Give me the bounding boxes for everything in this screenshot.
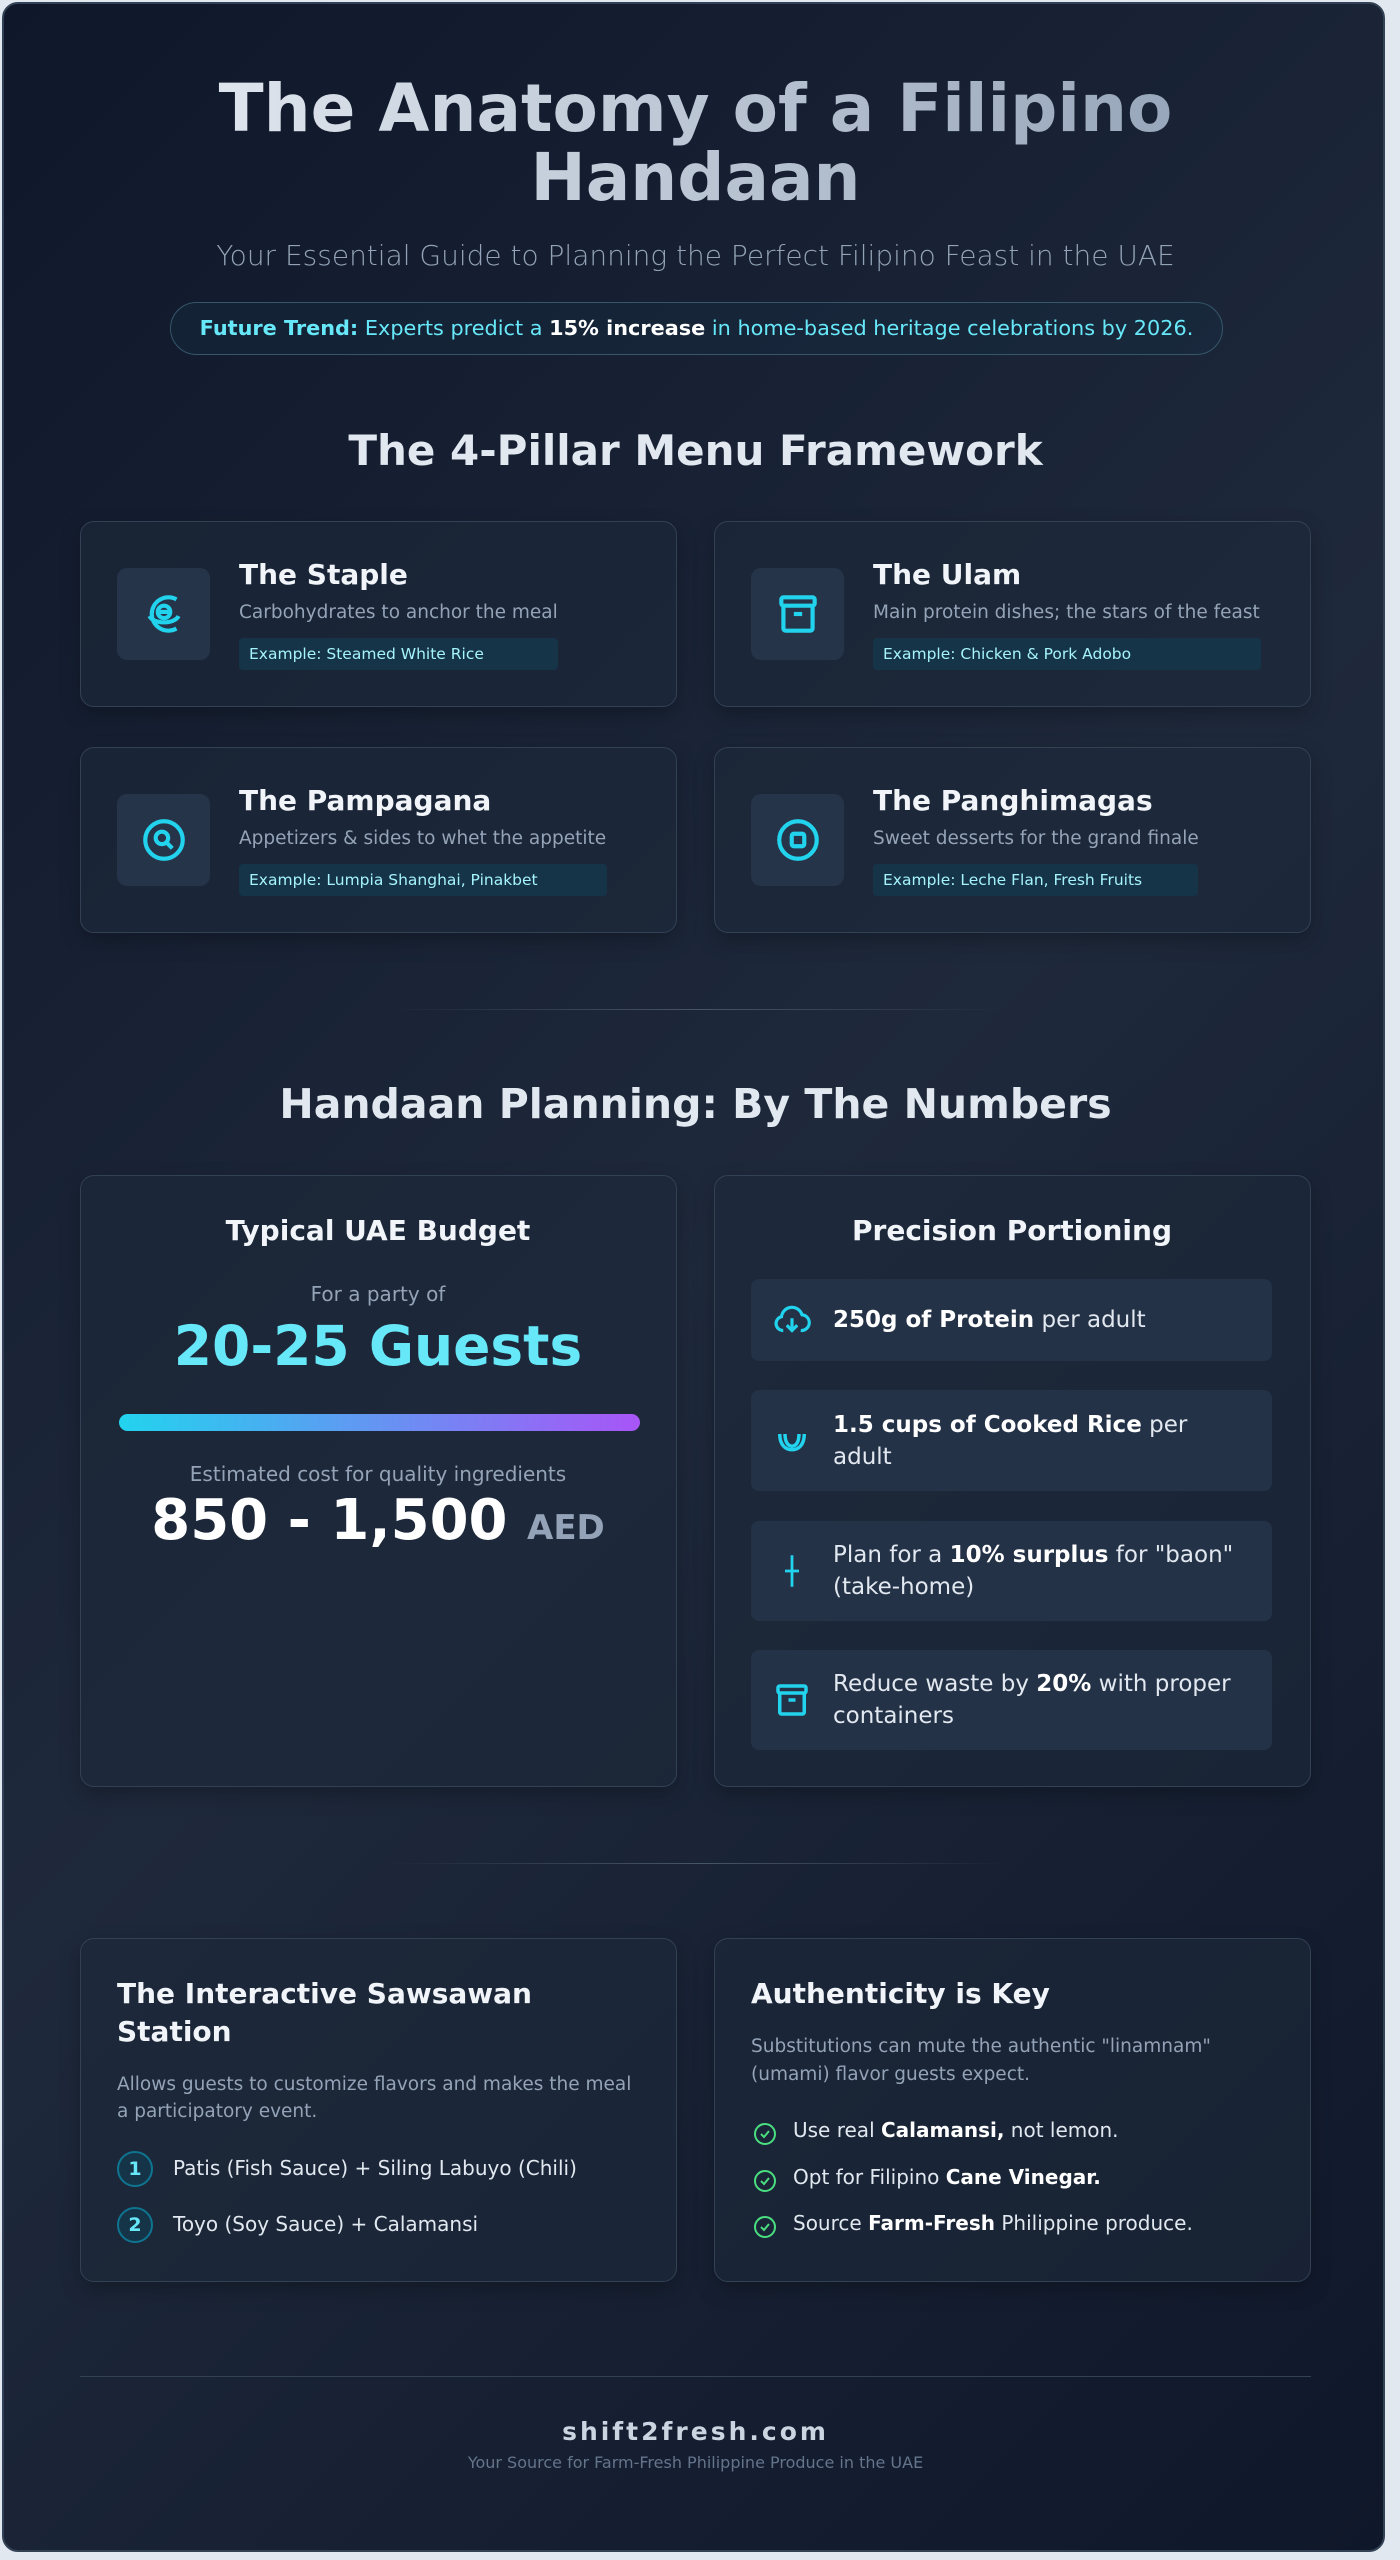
tag: example <box>239 864 607 896</box>
footer: brand: shift2fresh.com <box>562 2417 829 2446</box>
stat: guests: 20-25 Guests <box>174 1314 582 1378</box>
panel: the panghimagas: The Panghimagas <box>873 784 1153 817</box>
item: containers: Reduce waste by 20% with proper containers <box>833 1671 1231 1729</box>
callout: future trend <box>170 302 1223 355</box>
panel: the staple: Carbohydrates to anchor the meal <box>239 602 558 623</box>
panel: budget: Typical UAE Budget <box>226 1214 530 1247</box>
icon: search circle <box>117 794 210 886</box>
item: rice <box>751 1390 1272 1491</box>
check item 3: Source Farm-Fresh Philippine produce. <box>793 2211 1193 2235</box>
heading: by the numbers: Handaan Planning: By The Numbers <box>279 1080 1112 1128</box>
panel: budget <box>80 1175 677 1787</box>
check item 1: Use real Calamansi, not lemon. <box>793 2118 1119 2142</box>
list item 2 <box>117 2207 153 2243</box>
panel: the ulam <box>714 521 1311 707</box>
icon: container <box>751 568 844 660</box>
item: protein <box>751 1279 1272 1361</box>
panel: the ulam: The Ulam <box>873 558 1021 591</box>
stat: cost: 850 - 1,500 AED <box>151 1488 605 1553</box>
item: surplus: Plan for a 10% surplus for "baon" (take-home) <box>833 1542 1233 1600</box>
tag: example <box>239 638 558 670</box>
list item 1 <box>117 2151 153 2187</box>
gradient bar <box>119 1414 640 1431</box>
panel: the staple: The Staple <box>239 558 408 591</box>
heading: 4-pillar: The 4-Pillar Menu Framework <box>348 426 1043 475</box>
callout: future trend: Future Trend: Experts predict a 15% increase in home-based heritage celebrations by 2026. <box>200 316 1193 340</box>
tag: example <box>873 864 1198 896</box>
panel: the ulam: Main protein dishes; the stars of the feast <box>873 602 1260 623</box>
icon: rice bowl <box>117 568 210 660</box>
check item 2: Opt for Filipino Cane Vinegar. <box>793 2165 1101 2189</box>
tag: example: Example: Chicken & Pork Adobo <box>883 645 1131 663</box>
panel: sawsawan: Toyo (Soy Sauce) + Calamansi <box>173 2212 478 2236</box>
icon: stop circle <box>751 794 844 886</box>
item: surplus <box>751 1521 1272 1621</box>
panel: sawsawan: Station <box>117 2015 232 2048</box>
tag: example: Example: Leche Flan, Fresh Fruits <box>883 871 1142 889</box>
panel: sawsawan <box>80 1938 677 2282</box>
subtitle: Your Essential Guide to Planning the Perfect Filipino Feast in the UAE <box>216 239 1175 272</box>
tag: example: Example: Steamed White Rice <box>249 645 484 663</box>
panel: authenticity: Substitutions can mute the authentic "linamnam" (umami) flavor guests expect. <box>751 2036 1211 2085</box>
panel: sawsawan: Patis (Fish Sauce) + Siling Labuyo (Chili) <box>173 2156 577 2180</box>
item: protein: 250g of Protein per adult <box>833 1307 1146 1333</box>
title: The Anatomy of a Filipino Handaan <box>219 70 1172 216</box>
item: containers <box>751 1650 1272 1750</box>
panel: authenticity: Authenticity is Key <box>751 1977 1050 2010</box>
panel: the panghimagas: Sweet desserts for the grand finale <box>873 828 1199 849</box>
panel: the pampagana: The Pampagana <box>239 784 491 817</box>
panel: the pampagana <box>80 747 677 933</box>
panel: portioning: Precision Portioning <box>852 1214 1172 1247</box>
footer: tagline: Your Source for Farm-Fresh Philippine Produce in the UAE <box>468 2453 923 2472</box>
panel: budget: For a party of <box>311 1282 445 1306</box>
tag: example: Example: Lumpia Shanghai, Pinakbet <box>249 871 538 889</box>
panel: the pampagana: Appetizers & sides to whet the appetite <box>239 828 606 849</box>
list item 1: 1 <box>128 2158 142 2180</box>
panel: authenticity <box>714 1938 1311 2282</box>
panel: budget: Estimated cost for quality ingredients <box>190 1462 566 1486</box>
panel: sawsawan: The Interactive Sawsawan <box>117 1977 532 2010</box>
item: rice: 1.5 cups of Cooked Rice per adult <box>833 1412 1187 1470</box>
panel: the panghimagas <box>714 747 1311 933</box>
list item 2: 2 <box>128 2214 142 2236</box>
panel: sawsawan: Allows guests to customize flavors and makes the meal a participatory event. <box>117 2074 631 2122</box>
panel: portioning <box>714 1175 1311 1787</box>
tag: example <box>873 638 1261 670</box>
panel: the staple <box>80 521 677 707</box>
